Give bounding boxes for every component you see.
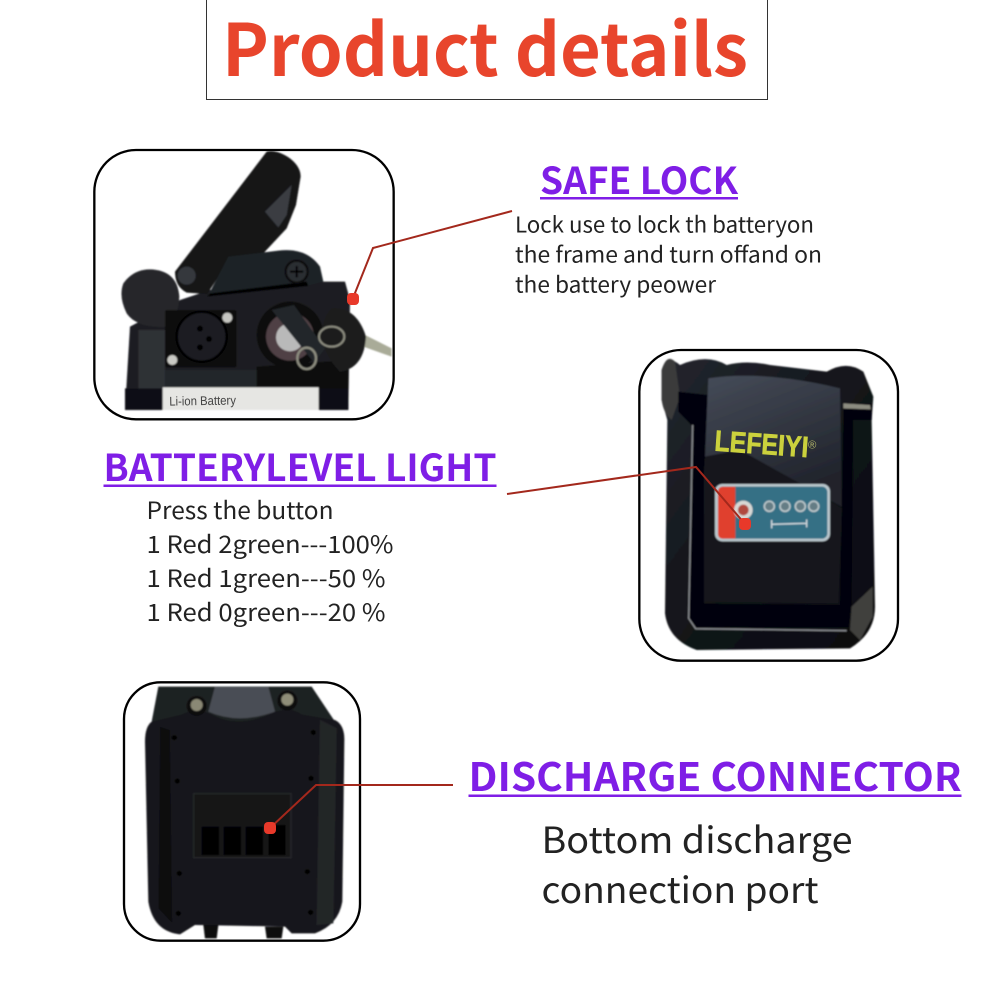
- panel: battery level light photo: ®: [808, 439, 817, 451]
- text: safe lock description: the frame and turn offand on: [515, 238, 822, 270]
- lid: [705, 376, 842, 507]
- text: safe lock description: [515, 208, 822, 300]
- battery body: [125, 282, 350, 410]
- arrow: safe lock leader: [347, 211, 512, 305]
- text: battery level description: Press the button: [146, 491, 334, 526]
- text: battery level description: [146, 491, 394, 628]
- hinge: [208, 250, 323, 295]
- heading: discharge connector: DISCHARGE CONNECTOR: [468, 747, 962, 803]
- text: battery level description: 1 Red 0green---20 %: [146, 593, 386, 628]
- port: [194, 794, 291, 858]
- logo: LEFEIYI: [714, 425, 810, 464]
- label: [163, 387, 319, 410]
- text: safe lock description: the battery peower: [515, 268, 716, 300]
- bolts: [187, 696, 207, 716]
- heading: battery level light: BATTERYLEVEL LIGHT: [104, 438, 496, 492]
- panel: battery level light photo: [639, 350, 898, 661]
- top cone: [152, 687, 335, 722]
- text: discharge connector description: connection port: [542, 862, 819, 914]
- arrow: discharge connector leader: [264, 785, 453, 834]
- text: discharge connector description: Bottom discharge: [542, 812, 852, 864]
- lock: [257, 302, 323, 368]
- text: battery level description: 1 Red 1green---50 %: [146, 559, 386, 594]
- text: discharge connector description: [542, 812, 852, 914]
- xlr: [165, 310, 237, 367]
- key fob: [330, 312, 367, 372]
- text: battery level description: 1 Red 2green---100%: [146, 525, 394, 560]
- case: [662, 359, 875, 650]
- text: safe lock description: Lock use to lock th batteryon: [515, 208, 814, 240]
- heading: safe lock: SAFE LOCK: [540, 151, 739, 205]
- side channels: [678, 392, 872, 627]
- panel: safe lock photo: Li-ion Battery: [169, 393, 237, 409]
- handle: [175, 151, 301, 294]
- cap: [121, 269, 179, 327]
- body: [145, 710, 344, 934]
- key blade: [363, 335, 392, 357]
- screw holes: [172, 735, 177, 740]
- panel: [715, 484, 830, 541]
- panel: discharge connector photo: [124, 682, 360, 941]
- panel: safe lock photo: [94, 150, 394, 419]
- arrow: battery level leader: [507, 467, 751, 530]
